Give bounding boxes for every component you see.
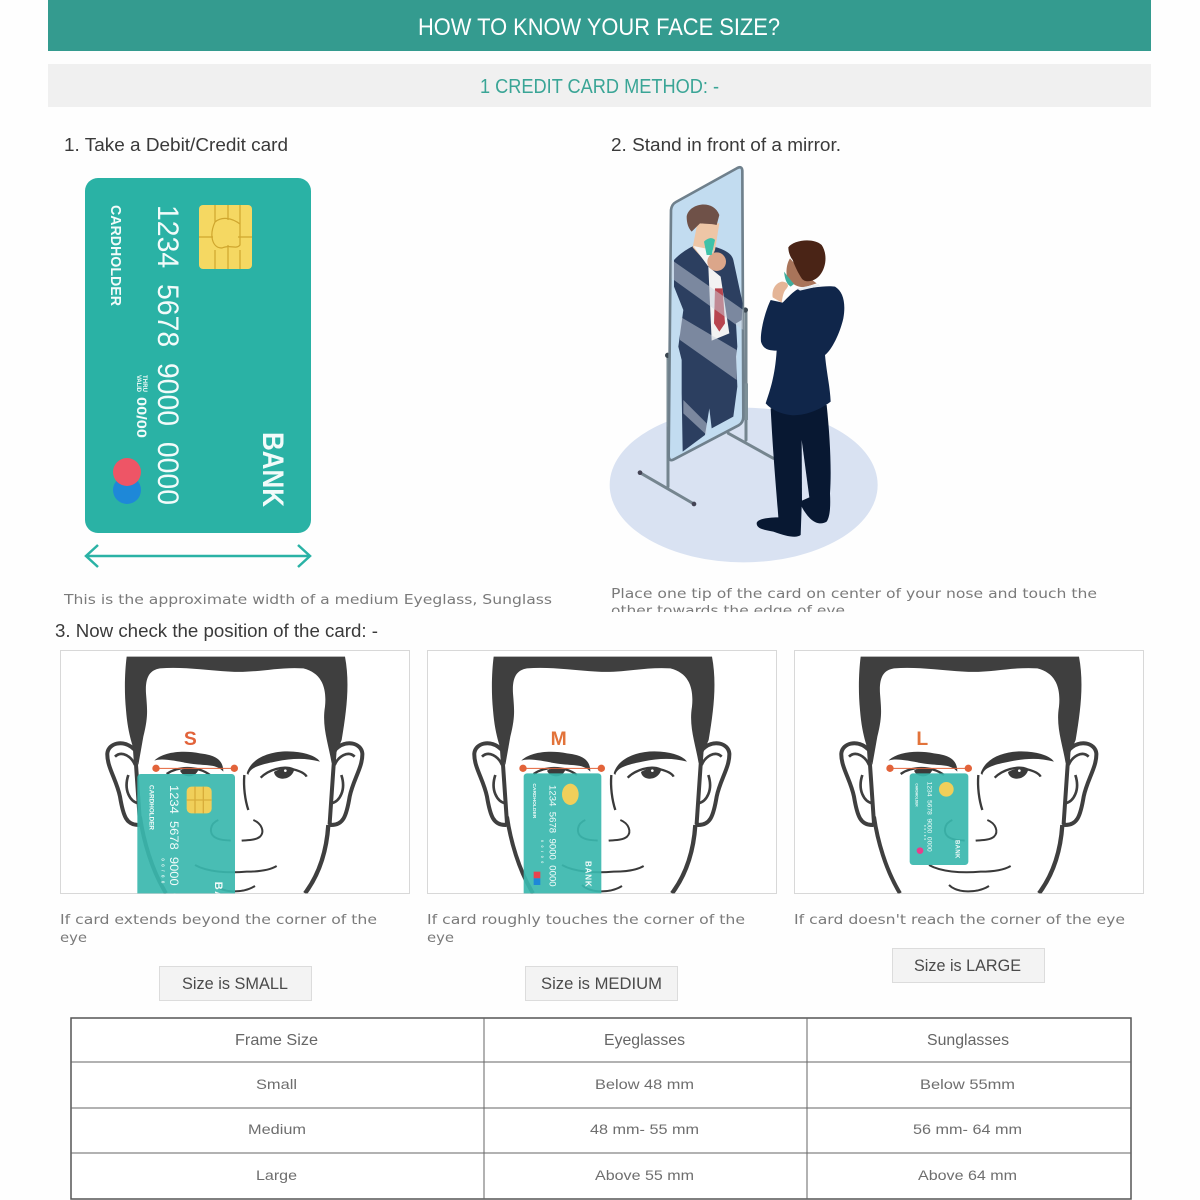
- caption: small: If card extends beyond the corner of the: [60, 912, 377, 928]
- face with small card: S: [184, 729, 197, 750]
- mirror illustration: [610, 167, 878, 562]
- table row: medium: [248, 1121, 1022, 1137]
- face with medium card: 1234 5678 9000 0000: [548, 785, 558, 887]
- bank name: BANK: [256, 432, 289, 507]
- caption: medium: eye: [427, 930, 454, 946]
- face with small card: BANK: [212, 882, 224, 919]
- table row: medium: 48 mm- 55 mm: [590, 1121, 699, 1137]
- floor ellipse: [610, 408, 878, 562]
- panel: large face: [794, 650, 1144, 894]
- step 2 caption: other towards the edge of eye: [611, 603, 845, 619]
- table row: small: Small: [256, 1076, 297, 1092]
- title banner: [48, 0, 1151, 51]
- step 2 caption: [612, 588, 1096, 612]
- mirror stand: [638, 307, 773, 506]
- button: size large: [892, 948, 1044, 982]
- table row: small: Below 55mm: [920, 1076, 1015, 1092]
- expiry date: [134, 375, 150, 438]
- face with large card: [841, 657, 1096, 893]
- face with large card: 1234 5678 9000 0000: [925, 782, 932, 852]
- card logo: [113, 458, 141, 504]
- face with small card: 00/00: [161, 858, 166, 884]
- table row: large: [256, 1167, 1017, 1183]
- credit card illustration: [85, 178, 311, 533]
- expiry date: THRU: [141, 375, 147, 392]
- man: [757, 240, 844, 537]
- table row: large: Above 64 mm: [918, 1167, 1017, 1183]
- caption: medium: If card roughly touches the corner of the: [427, 912, 745, 928]
- face with medium card: BANK: [583, 861, 592, 887]
- button: size medium: [526, 966, 678, 1000]
- panel: small face: [60, 650, 410, 922]
- frame size table: [71, 1018, 1131, 1199]
- step 2 caption: Place one tip of the card on center of your nose and touch the: [611, 586, 1097, 602]
- table header row: [235, 1032, 1009, 1049]
- card number: 1234 5678 9000 0000: [151, 205, 184, 505]
- table row: medium: Medium: [248, 1121, 306, 1137]
- step 1 heading: 1. Take a Debit/Credit card: [64, 135, 288, 155]
- section heading: credit card method: [48, 64, 1151, 107]
- face with small card: [107, 657, 362, 922]
- face with small card: CARDHOLDER: [147, 785, 153, 831]
- table row: small: [256, 1076, 1015, 1092]
- face with large card: 00/00: [923, 825, 927, 841]
- face with large card: BANK: [954, 840, 960, 859]
- arrow: card width: [86, 545, 310, 567]
- reflection of man: [672, 204, 743, 452]
- table header row: Sunglasses: [927, 1032, 1009, 1049]
- table header row: Frame Size: [235, 1032, 318, 1049]
- button: size small: [160, 966, 312, 1000]
- face with large card: CARDHOLDER: [915, 783, 919, 807]
- caption: small: eye: [60, 930, 87, 946]
- expiry date: VALID: [135, 375, 141, 393]
- card chip: [199, 205, 252, 269]
- expiry date: 00/00: [134, 397, 150, 438]
- face with large card: L: [916, 729, 928, 750]
- step 3 heading: 3. Now check the position of the card: -: [55, 621, 378, 641]
- caption: medium: [427, 912, 745, 946]
- button: size small: Size is SMALL: [182, 974, 288, 993]
- caption: large: If card doesn't reach the corner of the eye: [794, 912, 1125, 928]
- face with medium card: [474, 657, 729, 913]
- step 2 heading: 2. Stand in front of a mirror.: [611, 135, 841, 155]
- mirror: [669, 167, 743, 460]
- cardholder label: CARDHOLDER: [107, 205, 124, 306]
- face with small card: 1234 5678 9000 0000: [167, 785, 181, 922]
- face with medium card: 00/00: [540, 840, 544, 863]
- caption: small: [60, 912, 377, 946]
- face with medium card: M: [551, 729, 567, 750]
- button: size medium: Size is MEDIUM: [541, 974, 662, 993]
- table row: large: Large: [256, 1167, 297, 1183]
- table row: medium: 56 mm- 64 mm: [913, 1121, 1022, 1137]
- title banner: HOW TO KNOW YOUR FACE SIZE?: [418, 14, 780, 41]
- section heading: credit card method: 1 CREDIT CARD METHOD: -: [480, 76, 719, 98]
- table row: large: Above 55 mm: [595, 1167, 694, 1183]
- button: size large: Size is LARGE: [914, 956, 1021, 975]
- face with medium card: CARDHOLDER: [532, 783, 537, 819]
- step 1 caption: This is the approximate width of a medium Eyeglass, Sunglass: [63, 592, 552, 608]
- table header row: Eyeglasses: [604, 1032, 685, 1049]
- table row: small: Below 48 mm: [595, 1076, 694, 1092]
- panel: medium face: [428, 650, 776, 913]
